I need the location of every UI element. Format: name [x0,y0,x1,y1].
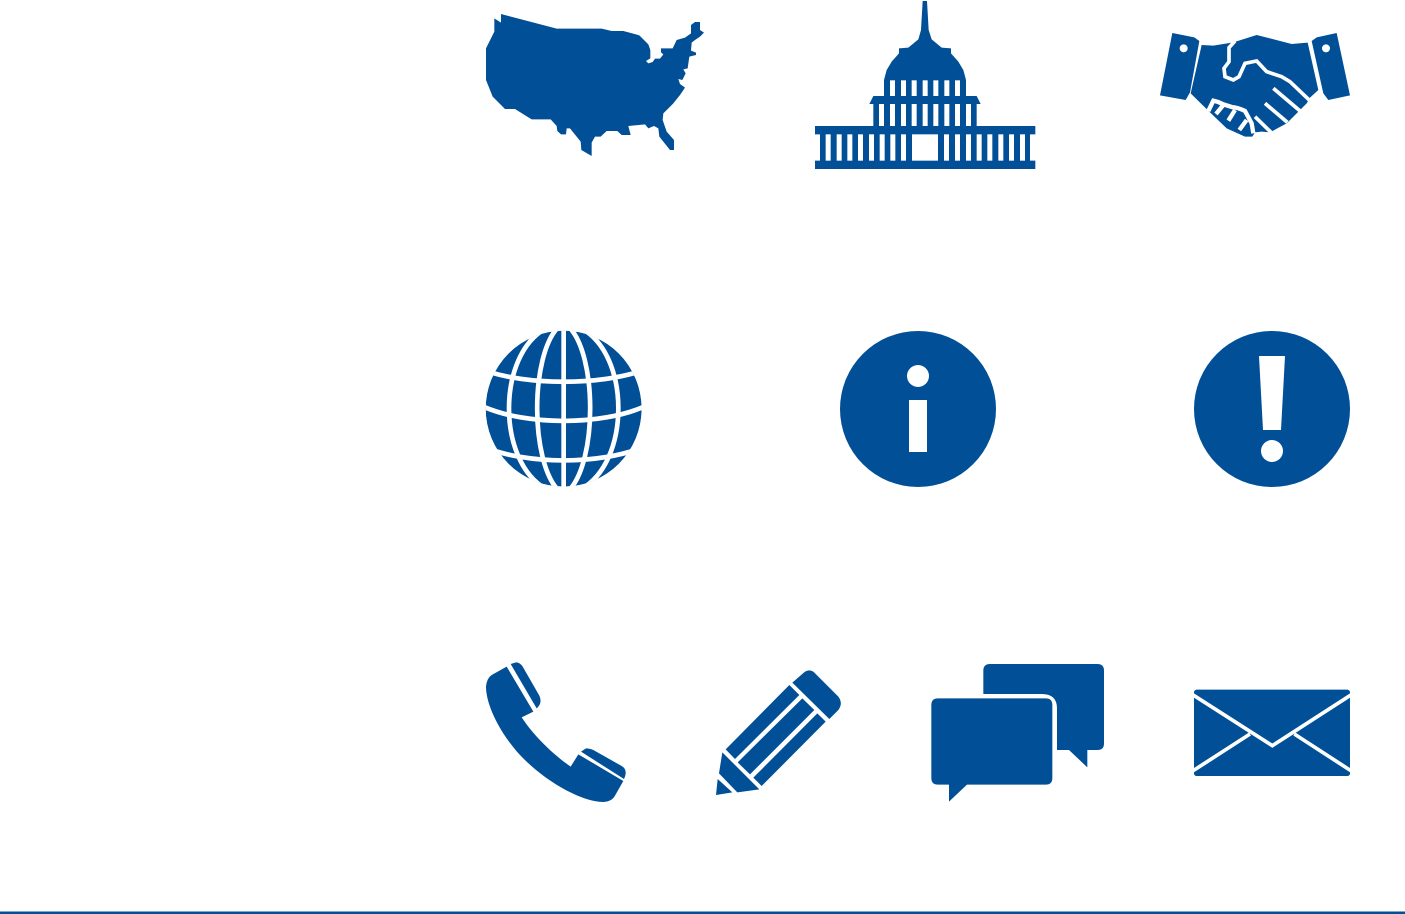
icon: envelope [1193,690,1351,776]
icon: speech bubbles [931,664,1104,802]
icon: exclamation [1194,331,1350,487]
icon: Capitol building [815,1,1035,169]
icon: handshake [1160,33,1350,137]
icon: globe [483,325,644,492]
icon: United States map [486,14,704,156]
bottom rule [0,912,1405,914]
icon: information [840,331,996,487]
icon: pencil [716,670,841,795]
icon: telephone [486,662,626,802]
